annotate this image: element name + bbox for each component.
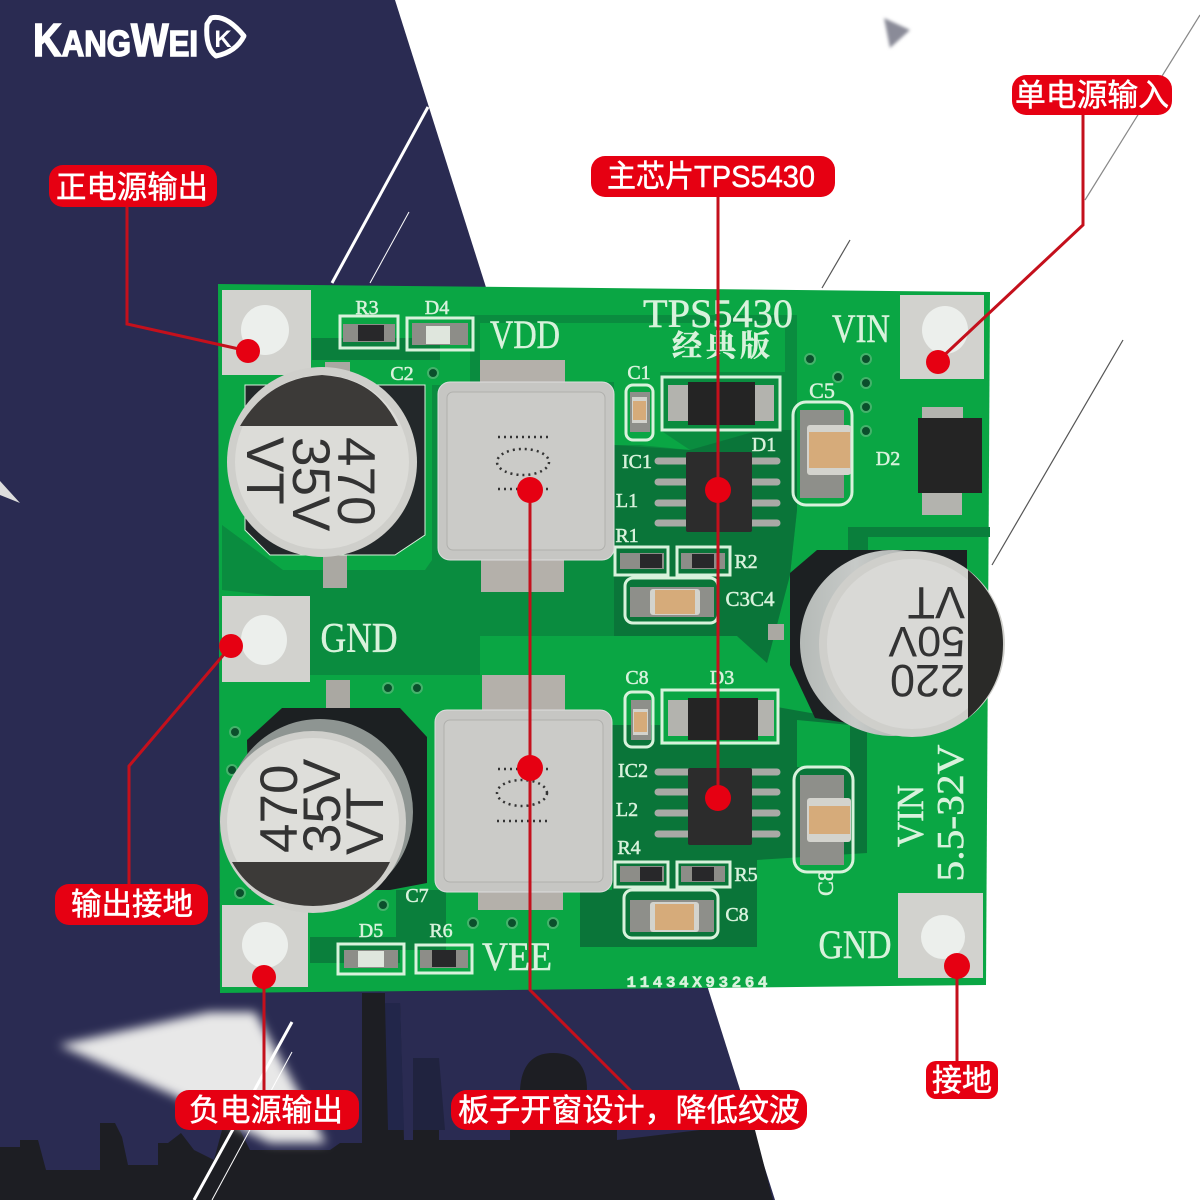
capacitor: 220 50V right: VT: [907, 577, 965, 628]
silkscreen labels: C3C4: [725, 587, 775, 611]
silkscreen labels: VIN: [832, 306, 890, 351]
callout: 板子开窗设计，降低纹波: 板子开窗设计，降低纹波: [458, 1093, 800, 1128]
silkscreen labels: R1: [615, 525, 639, 547]
capacitor: 220 50V right: 50V: [888, 617, 965, 665]
silkscreen labels: C1: [627, 362, 651, 384]
silkscreen labels: R3: [355, 297, 379, 319]
mounting pads: [222, 290, 984, 987]
callout: 主芯片TPS5430: 主芯片TPS5430: [607, 159, 815, 194]
resistors and LEDs: [338, 316, 730, 974]
silkscreen labels: C2: [390, 363, 414, 385]
via holes: [227, 354, 871, 928]
silkscreen labels: 5.5-32V: [930, 744, 972, 882]
silkscreen labels: L1: [616, 490, 638, 512]
silkscreen labels: L2: [616, 799, 638, 821]
capacitor: 470 35V top: 35V: [281, 437, 340, 532]
capacitor: 220 50V right: [800, 550, 1005, 737]
silkscreen labels: R4: [617, 837, 641, 859]
capacitor: 220 50V right: 220: [890, 655, 965, 706]
silkscreen labels: VIN: [890, 785, 932, 847]
capacitor: 470 35V top: 470: [326, 437, 385, 525]
callout dots: [219, 339, 970, 989]
silkscreen labels: C8: [725, 904, 749, 926]
silkscreen labels: D2: [876, 448, 900, 470]
silkscreen labels: IC1: [622, 451, 652, 473]
capacitor: 470 35V bottom: [220, 719, 413, 913]
capacitor: 470 35V bottom: VT: [336, 787, 395, 855]
silkscreen labels: 经典版: [672, 321, 770, 365]
capacitor: 470 35V top: [227, 367, 417, 557]
silkscreen labels: VDD: [490, 312, 560, 357]
capacitor: 470 35V top: VT: [235, 437, 294, 505]
callout: 负电源输出: 负电源输出: [189, 1093, 343, 1128]
logo: KangWei: K: [214, 26, 232, 53]
logo: KangWei: KANGWEI: [33, 14, 198, 66]
diodes: [668, 382, 982, 740]
silkscreen labels: R6: [429, 920, 453, 942]
capacitor: 470 35V bottom: 35V: [293, 758, 352, 853]
callout: 输出接地: [55, 884, 208, 925]
silkscreen labels: [320, 291, 972, 992]
silkscreen labels: TPS5430: [643, 291, 793, 336]
callout leader lines: [127, 115, 1083, 1092]
electrolytic capacitors: [220, 362, 1005, 913]
silkscreen labels: R2: [734, 551, 758, 573]
silkscreen labels: 11434X93264: [626, 974, 768, 992]
silkscreen labels: IC2: [618, 760, 648, 782]
silkscreen labels: D4: [425, 297, 449, 319]
silkscreen labels: C8: [625, 667, 649, 689]
callout: 单电源输入: 单电源输入: [1015, 78, 1169, 113]
ceramic capacitors: [624, 377, 853, 938]
silkscreen labels: VEE: [482, 934, 552, 979]
callout: 输出接地: 输出接地: [71, 887, 193, 922]
callout: 接地: 接地: [932, 1063, 992, 1098]
inductors: [435, 360, 614, 910]
silkscreen labels: C7: [405, 885, 429, 907]
silkscreen labels: D1: [752, 434, 776, 456]
silkscreen labels: GND: [818, 922, 892, 967]
silkscreen labels: GND: [320, 616, 398, 662]
capacitor: 470 35V bottom: 470: [250, 765, 309, 853]
IC chips: [658, 452, 777, 845]
silkscreen labels: C5: [809, 378, 835, 403]
silkscreen labels: R5: [734, 864, 758, 886]
silkscreen labels: C8: [813, 870, 838, 896]
silkscreen labels: D3: [710, 667, 734, 689]
circuit board: [218, 284, 1005, 993]
silkscreen labels: D5: [359, 920, 383, 942]
callout: 正电源输出: 正电源输出: [56, 170, 208, 205]
